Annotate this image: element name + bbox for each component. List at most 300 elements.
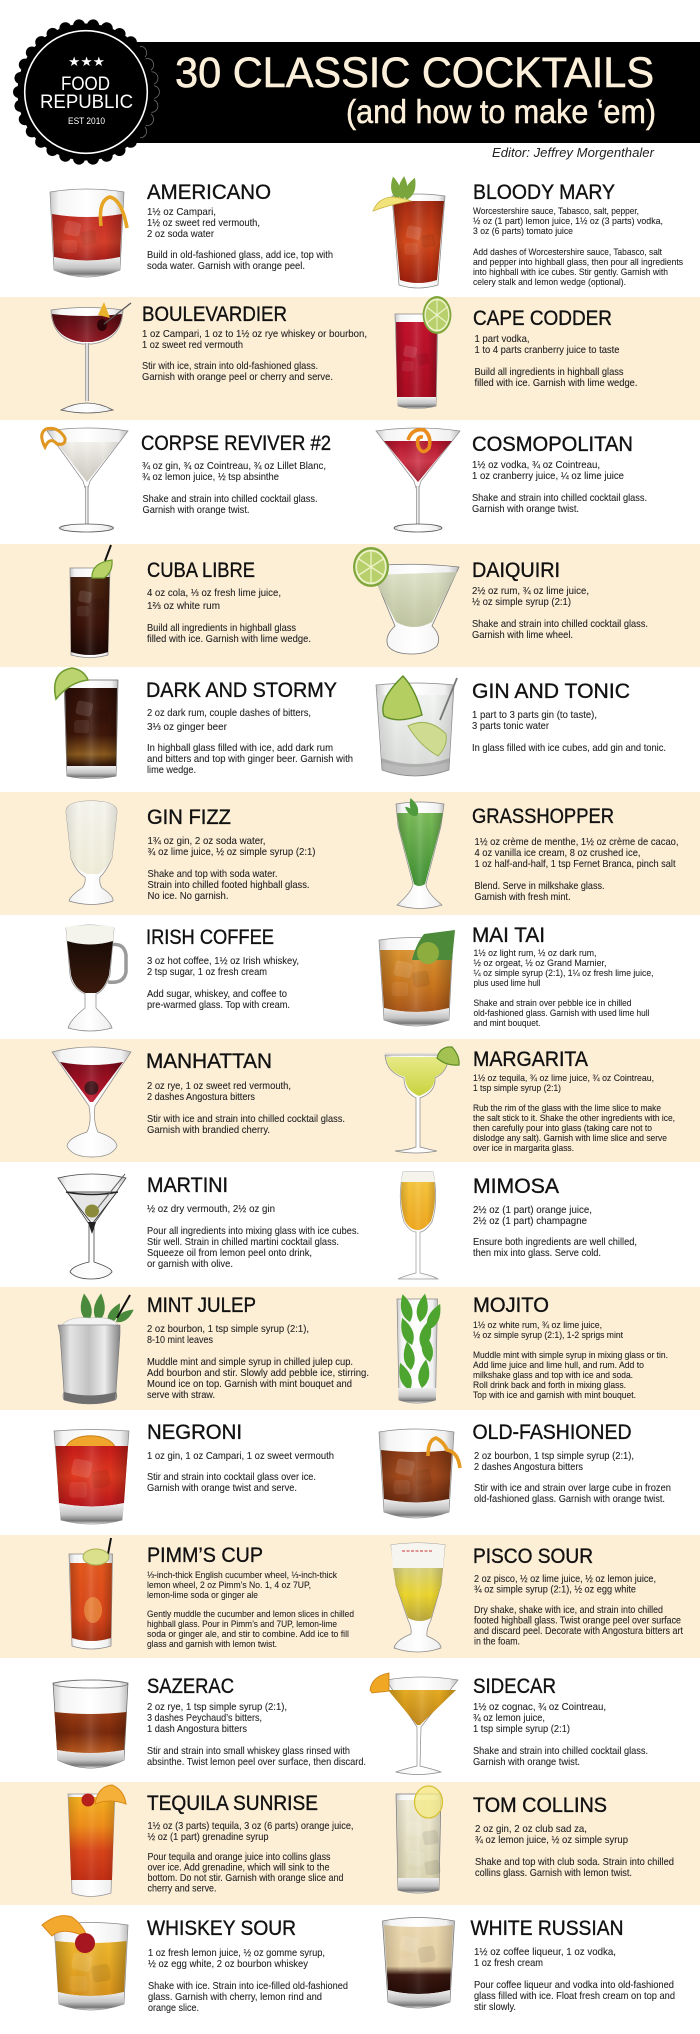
ingredients: 1 oz fresh cream	[474, 1957, 543, 1969]
method: Garnish with fresh mint.	[474, 891, 570, 903]
method: Build all ingredients in highball glass	[147, 622, 296, 634]
method: stir slowly.	[474, 2001, 516, 2013]
ingredients	[472, 459, 624, 482]
method: filled with ice. Garnish with lime wedge.	[147, 633, 311, 645]
method: Roll drink back and forth in mixing glass.	[473, 1380, 626, 1391]
method	[474, 1604, 683, 1648]
method	[474, 1979, 675, 2013]
method: Stir with ice and strain over large cube in frozen	[474, 1482, 671, 1494]
panel: Boulevardier	[51, 302, 367, 413]
method: dislodge any salt). Garnish with lime slice and serve	[473, 1133, 667, 1144]
method: Top with ice and garnish with mint bouquet.	[473, 1390, 636, 1401]
panel: Old-Fashioned	[379, 1421, 671, 1518]
ingredients	[147, 587, 281, 612]
method: Build in old-fashioned glass, add ice, top with	[147, 249, 333, 261]
icon: boulevardier coupe	[51, 302, 131, 413]
heading: PIMM’S CUP	[147, 1544, 263, 1567]
panel: Negroni	[54, 1421, 334, 1524]
icon: mai tai glass	[379, 930, 455, 1026]
ingredients	[147, 1080, 291, 1103]
icon: dark and stormy highball	[55, 668, 118, 778]
ingredients	[147, 955, 299, 978]
ingredients	[142, 460, 326, 483]
icon: mimosa flute	[398, 1172, 438, 1279]
method: soda water. Garnish with orange peel.	[147, 260, 305, 272]
title: 30 CLASSIC COCKTAILS	[175, 49, 654, 97]
method: Mound ice on top. Garnish with mint bouquet and	[147, 1378, 352, 1390]
icon: irish coffee mug	[66, 925, 126, 1031]
ingredients: 1½ oz sweet red vermouth,	[147, 217, 260, 229]
method	[147, 1356, 369, 1401]
method: pre-warmed glass. Top with cream.	[147, 999, 290, 1011]
panel: Tequila Sunrise	[68, 1785, 354, 1896]
heading: SAZERAC	[147, 1675, 234, 1698]
ingredients: 3 oz (6 parts) tomato juice	[473, 226, 573, 237]
method: absinthe. Twist lemon peel over surface, then discard.	[147, 1756, 366, 1768]
icon: cuba libre highball	[70, 545, 112, 658]
panel: Pisco Sour	[391, 1543, 683, 1652]
logo badge: EST 2010	[68, 116, 105, 127]
heading: MARTINI	[147, 1174, 228, 1197]
panel: Grasshopper	[396, 797, 678, 908]
icon: grasshopper glass	[396, 797, 444, 908]
heading: PISCO SOUR	[473, 1545, 593, 1568]
icon: whiskey sour glass	[42, 1916, 128, 2010]
ingredients	[473, 1204, 592, 1227]
method	[148, 868, 310, 902]
heading: WHITE RUSSIAN	[470, 1917, 624, 1940]
ingredients	[147, 206, 260, 240]
ingredients: 1 tsp simple syrup (2:1)	[473, 1723, 570, 1735]
panel: Mint Julep	[58, 1293, 369, 1404]
ingredients: 1⅔ oz white rum	[147, 600, 220, 612]
method: Shake and top with soda water.	[148, 868, 278, 880]
ingredients: 2 oz soda water	[147, 228, 214, 240]
icon: gin and tonic glass	[376, 676, 457, 776]
icon: martini glass	[58, 1174, 126, 1279]
ingredients: 1 oz fresh lemon juice, ½ oz gomme syrup,	[148, 1947, 325, 1959]
method: soda or ginger ale, and stir to combine. Add ice to fill	[147, 1629, 349, 1640]
heading: GIN AND TONIC	[472, 680, 630, 703]
ingredients: 2 oz gin, 2 oz club sad za,	[475, 1823, 587, 1835]
heading: OLD-FASHIONED	[472, 1421, 632, 1444]
ingredients: ½ oz (1 part) lemon juice, 1½ oz (3 parts) vodka,	[473, 216, 663, 227]
heading: COSMOPOLITAN	[472, 433, 633, 456]
header banner	[18, 24, 700, 160]
ingredients: 3 dashes Peychaud’s bitters,	[147, 1712, 262, 1724]
icon: mint julep cup	[58, 1293, 136, 1404]
ingredients: ¼ oz simple syrup (2:1), 1¼ oz fresh lime juice,	[474, 968, 654, 979]
ingredients: 1 oz half-and-half, 1 tsp Fernet Branca, pinch salt	[474, 858, 676, 870]
ingredients: 1 part to 3 parts gin (to taste),	[472, 709, 597, 721]
ingredients: ¾ oz gin, ¾ oz Cointreau, ¾ oz Lillet Blanc,	[142, 460, 326, 472]
ingredients	[474, 1946, 616, 1969]
method: Shake and strain into chilled cocktail glass.	[472, 618, 648, 630]
method: Add lime juice and lime hull, and rum. Add to	[473, 1360, 644, 1371]
ingredients: 1¾ oz gin, 2 oz soda water,	[148, 835, 266, 847]
heading: MANHATTAN	[146, 1050, 272, 1073]
ingredients: 3 oz hot coffee, 1½ oz Irish whiskey,	[147, 955, 299, 967]
panel: Daiquiri	[353, 547, 648, 654]
method: over ice in margarita glass.	[473, 1143, 574, 1154]
panel: Cuba Libre	[70, 545, 311, 658]
ingredients: ⅓-inch-thick English cucumber wheel, ⅓-inch-thick	[147, 1570, 337, 1581]
icon: cape codder highball	[395, 296, 451, 408]
method	[142, 493, 318, 516]
panel: Mimosa	[398, 1172, 637, 1279]
method: Pour tequila and orange juice into collins glass	[148, 1851, 330, 1863]
method: Shake and strain into chilled cocktail glass.	[473, 1745, 648, 1757]
logo badge: REPUBLIC	[40, 92, 133, 113]
ingredients	[474, 836, 678, 870]
ingredients: 2 dashes Angostura bitters	[474, 1461, 583, 1473]
method: Garnish with orange twist.	[142, 504, 250, 516]
method: and mint bouquet.	[474, 1018, 540, 1029]
ingredients: lemon-lime soda or ginger ale	[147, 1590, 258, 1601]
method: In highball glass filled with ice, add dark rum	[147, 742, 333, 754]
ingredients	[473, 206, 663, 237]
ingredients: 1 to 4 parts cranberry juice to taste	[474, 344, 620, 356]
icon: daiquiri glass	[353, 547, 459, 654]
icon: cosmopolitan glass	[376, 428, 460, 532]
panel: Pimm's Cup	[69, 1538, 354, 1650]
ingredients	[147, 1570, 337, 1601]
heading: NEGRONI	[147, 1421, 242, 1444]
method	[147, 1609, 354, 1650]
ingredients: 2 oz pisco, ½ oz lime juice, ½ oz lemon juice,	[474, 1573, 656, 1585]
ingredients: 1½ oz vodka, ¾ oz Cointreau,	[472, 459, 600, 471]
heading: MOJITO	[473, 1294, 549, 1317]
method	[474, 998, 650, 1029]
ingredients: 2 oz rye, 1 tsp simple syrup (2:1),	[147, 1701, 287, 1713]
heading: GIN FIZZ	[147, 806, 231, 829]
heading: SIDECAR	[473, 1675, 556, 1698]
ingredients: 1½ oz crème de menthe, 1½ oz crème de cacao,	[474, 836, 678, 848]
method	[474, 366, 638, 389]
method: orange slice.	[148, 2002, 199, 2014]
panel: Martini	[58, 1174, 359, 1279]
ingredients: 3 parts tonic water	[472, 720, 549, 732]
icon: white russian glass	[382, 1918, 454, 2008]
method: celery stalk and lemon wedge (optional).	[473, 277, 626, 288]
panel: Cape Codder	[395, 296, 638, 408]
ingredients: 2½ oz rum, ¾ oz lime juice,	[472, 585, 589, 597]
icon: margarita glass	[385, 1047, 459, 1153]
method	[147, 1113, 345, 1136]
ingredients: 1½ oz (3 parts) tequila, 3 oz (6 parts) orange juice,	[148, 1820, 354, 1832]
logo badge: FOOD	[61, 74, 110, 95]
icon: pisco sour glass	[391, 1543, 445, 1652]
method	[148, 1851, 344, 1894]
method: Garnish with orange twist.	[472, 503, 579, 515]
method: Muddle mint with simple syrup in mixing glass or tin.	[473, 1350, 668, 1361]
method: bottom. Do not stir. Garnish with orange slice and	[148, 1872, 344, 1884]
ingredients	[148, 1820, 354, 1843]
ingredients: 2 oz bourbon, 1 tsp simple syrup (2:1),	[474, 1450, 634, 1462]
ingredients: ½ oz dry vermouth, 2½ oz gin	[147, 1203, 275, 1215]
icon: sidecar glass	[370, 1673, 458, 1774]
ingredients: 1 oz cranberry juice, ¼ oz lime juice	[472, 470, 624, 482]
icon: bloody mary glass	[373, 176, 445, 288]
method	[147, 622, 311, 645]
heading: MAI TAI	[472, 924, 545, 947]
method: then carefully pour into glass (taking care not to	[473, 1123, 652, 1134]
method: Dry shake, shake with ice, and strain into chilled	[474, 1604, 663, 1616]
method: Garnish with orange twist and serve.	[147, 1482, 297, 1494]
logo badge	[18, 24, 154, 160]
ingredients	[147, 1323, 309, 1346]
ingredients	[475, 1823, 628, 1846]
method: collins glass. Garnish with lemon twist.	[475, 1867, 632, 1879]
heading: MIMOSA	[473, 1175, 559, 1198]
method: filled with ice. Garnish with lime wedge.	[474, 377, 638, 389]
ingredients: 2 dashes Angostura bitters	[147, 1091, 255, 1103]
method	[472, 492, 647, 515]
ingredients: 1 dash Angostura bitters	[147, 1723, 247, 1735]
method	[473, 1103, 675, 1154]
ingredients	[474, 948, 654, 989]
method	[147, 1471, 316, 1494]
icon: negroni glass	[54, 1430, 129, 1524]
ingredients: ¾ oz lemon juice, ½ tsp absinthe	[142, 471, 279, 483]
method: Shake with ice. Strain into ice-filled old-fashioned	[148, 1980, 348, 1992]
icon: manhattan glass	[52, 1047, 131, 1157]
method: then mix into glass. Serve cold.	[473, 1247, 601, 1259]
method: serve with straw.	[147, 1389, 215, 1401]
icon: corpse reviver glass	[42, 428, 128, 532]
heading: WHISKEY SOUR	[147, 1917, 296, 1940]
panel: Dark and Stormy	[55, 668, 353, 778]
ingredients	[474, 1573, 656, 1596]
heading: TOM COLLINS	[473, 1794, 607, 1817]
method: Shake and top with club soda. Strain into chilled	[475, 1856, 674, 1868]
icon: americano glass	[50, 189, 127, 277]
heading: DAIQUIRI	[472, 559, 560, 582]
ingredients	[472, 585, 589, 608]
method	[474, 880, 604, 903]
method: Ensure both ingredients are well chilled,	[473, 1236, 637, 1248]
method: Pour coffee liqueur and vodka into old-fashioned	[474, 1979, 674, 1991]
ingredients: 1 oz Campari, 1 oz to 1½ oz rye whiskey or bourbon,	[142, 328, 367, 340]
method: Squeeze oil from lemon peel onto drink,	[147, 1247, 312, 1259]
ingredients: ½ oz egg white, 2 oz bourbon whiskey	[148, 1958, 309, 1970]
method: Garnish with orange peel or cherry and serve.	[142, 371, 333, 383]
method: Add bourbon and stir. Slowly add pebble ice, stirring.	[147, 1367, 369, 1379]
method: Shake and strain over pebble ice in chilled	[474, 998, 632, 1009]
method: Strain into chilled footed highball glass.	[148, 879, 310, 891]
ingredients	[148, 1947, 325, 1970]
method: Garnish with lime wheel.	[472, 629, 573, 641]
ingredients: 3⅓ oz ginger beer	[147, 721, 227, 733]
method: glass and garnish with lemon twist.	[147, 1639, 277, 1650]
ingredients: lemon wheel, 2 oz Pimm’s No. 1, 4 oz 7UP,	[147, 1580, 311, 1591]
method: the salt stick to it. Shake the other ingredients with ice,	[473, 1113, 675, 1124]
method	[147, 1225, 359, 1270]
panel: Whiskey Sour	[42, 1916, 348, 2014]
method	[472, 618, 648, 641]
method	[147, 249, 333, 272]
method: over ice. Add grenadine, which will sink to the	[148, 1862, 330, 1874]
ingredients: ¾ oz lemon juice,	[473, 1712, 545, 1724]
method: or garnish with olive.	[147, 1258, 233, 1270]
heading: GRASSHOPPER	[472, 805, 614, 828]
method: Shake and strain into chilled cocktail glass.	[142, 493, 318, 505]
ingredients: 1½ oz cognac, ¾ oz Cointreau,	[473, 1701, 606, 1713]
panel: Mai Tai	[379, 924, 654, 1029]
ingredients: 2 tsp sugar, 1 oz fresh cream	[147, 966, 267, 978]
ingredients: plus used lime hull	[474, 978, 540, 989]
subtitle: (and how to make ‘em)	[346, 93, 656, 130]
method: Blend. Serve in milkshake glass.	[474, 880, 604, 892]
method: Stir well. Strain in chilled martini cocktail glass.	[147, 1236, 339, 1248]
heading: IRISH COFFEE	[146, 926, 274, 949]
method: No ice. No garnish.	[148, 890, 228, 902]
method: old-fashioned glass. Garnish with used lime hull	[474, 1008, 650, 1019]
ingredients: 1½ oz light rum, ½ oz dark rum,	[474, 948, 596, 959]
method	[142, 360, 333, 383]
ingredients	[147, 707, 311, 733]
method: Add sugar, whiskey, and coffee to	[147, 988, 287, 1000]
method	[148, 1980, 348, 2014]
heading: TEQUILA SUNRISE	[147, 1792, 318, 1815]
panel: Margarita	[385, 1047, 675, 1154]
ingredients	[473, 1320, 623, 1341]
method: old-fashioned glass. Garnish with orange twist.	[474, 1493, 665, 1505]
panel: White Russian	[382, 1917, 675, 2013]
ingredients: 1½ oz white rum, ¾ oz lime juice,	[473, 1320, 602, 1331]
icon: tom collins highball	[396, 1786, 442, 1893]
method	[475, 1856, 674, 1879]
method: Muddle mint and simple syrup in chilled julep cup.	[147, 1356, 353, 1368]
ingredients	[474, 333, 620, 356]
method: highball glass. Pour in Pimm’s and 7UP, lemon-lime	[147, 1619, 337, 1630]
ingredients: 2 oz bourbon, 1 tsp simple syrup (2:1),	[147, 1323, 309, 1335]
ingredients	[473, 1701, 606, 1735]
method: Shake and strain into chilled cocktail glass.	[472, 492, 647, 504]
heading: CAPE CODDER	[473, 307, 612, 330]
method: Pour all ingredients into mixing glass with ice cubes.	[147, 1225, 359, 1237]
ingredients: 2 oz dark rum, couple dashes of bitters,	[147, 707, 311, 719]
ingredients: 2½ oz (1 part) orange juice,	[473, 1204, 592, 1216]
ingredients: 1½ oz tequila, ¾ oz lime juice, ¾ oz Cointreau,	[473, 1073, 654, 1084]
heading: AMERICANO	[147, 181, 271, 204]
method	[473, 1350, 668, 1401]
heading: CORPSE REVIVER #2	[141, 432, 331, 455]
method: and bitters and top with ginger beer. Garnish with	[147, 753, 353, 765]
ingredients: 1 oz gin, 1 oz Campari, 1 oz sweet vermouth	[147, 1450, 334, 1462]
ingredients: ¾ oz simple syrup (2:1), ½ oz egg white	[474, 1584, 636, 1596]
ingredients: 1½ oz coffee liqueur, 1 oz vodka,	[474, 1946, 616, 1958]
method: lime wedge.	[147, 764, 196, 776]
ingredients: 4 oz vanilla ice cream, 8 oz crushed ice,	[474, 847, 640, 859]
method: In glass filled with ice cubes, add gin and tonic.	[472, 742, 666, 754]
ingredients: 8-10 mint leaves	[147, 1334, 213, 1346]
panel: Sazerac	[53, 1675, 366, 1768]
ingredients: ¾ oz lime juice, ½ oz simple syrup (2:1)	[148, 846, 316, 858]
method: glass filled with ice. Float fresh cream on top and	[474, 1990, 675, 2002]
icon: mojito highball	[395, 1293, 445, 1403]
method: into highball with ice cubes. Stir gently. Garnish with	[473, 267, 668, 278]
ingredients: 1 oz sweet red vermouth	[142, 339, 243, 351]
heading: MINT JULEP	[147, 1294, 256, 1317]
panel: Bloody Mary	[373, 176, 683, 288]
ingredients: ½ oz simple syrup (2:1)	[472, 596, 571, 608]
ingredients: 2½ oz (1 part) champagne	[473, 1215, 587, 1227]
ingredients	[147, 1701, 287, 1735]
heading: DARK AND STORMY	[146, 679, 337, 702]
panel: Corpse Reviver #2	[42, 428, 331, 532]
method: Add dashes of Worcestershire sauce, Tabasco, salt	[473, 247, 662, 258]
method	[473, 1745, 648, 1768]
icon: gin fizz glass	[66, 801, 117, 904]
method: Stir with ice, strain into old-fashioned glass.	[142, 360, 318, 372]
panel: Gin and Tonic	[376, 676, 666, 776]
method: cherry and serve.	[148, 1882, 216, 1894]
ingredients	[142, 328, 367, 351]
ingredients: 2 oz rye, 1 oz sweet red vermouth,	[147, 1080, 291, 1092]
panel: Manhattan	[52, 1047, 345, 1157]
method: glass. Garnish with cherry, lemon rind and	[148, 1991, 322, 2003]
icon: pimm's cup highball	[69, 1538, 112, 1649]
panel: Tom Collins	[396, 1786, 674, 1893]
method	[474, 1482, 671, 1505]
method: Gently muddle the cucumber and lemon slices in chilled	[147, 1609, 354, 1620]
panel: Gin Fizz	[66, 801, 316, 904]
method	[473, 247, 683, 288]
method: Stir with ice and strain into chilled cocktail glass.	[147, 1113, 345, 1125]
ingredients	[474, 1450, 634, 1473]
panel: Sidecar	[370, 1673, 648, 1774]
method: Build all ingredients in highball glass	[474, 366, 624, 378]
logo badge: ★★★	[68, 54, 105, 69]
ingredients: ½ oz simple syrup (2:1), 1-2 sprigs mint	[473, 1330, 623, 1341]
ingredients	[472, 709, 597, 732]
editor credit: Editor: Jeffrey Morgenthaler	[492, 146, 655, 160]
method	[147, 742, 353, 776]
ingredients	[473, 1073, 654, 1094]
panel: Mojito	[395, 1293, 668, 1403]
method: Rub the rim of the glass with the lime slice to make	[473, 1103, 661, 1114]
ingredients: ½ oz orgeat, ½ oz Grand Marnier,	[474, 958, 606, 969]
icon: sazerac glass	[53, 1680, 128, 1768]
method: milkshake glass and top with ice and soda.	[473, 1370, 633, 1381]
ingredients: ½ oz (1 part) grenadine syrup	[148, 1831, 269, 1843]
method	[473, 1236, 637, 1259]
ingredients: 1 tsp simple syrup (2:1)	[473, 1083, 561, 1094]
method: Garnish with brandied cherry.	[147, 1124, 270, 1136]
ingredients: 4 oz cola, ⅓ oz fresh lime juice,	[147, 587, 281, 599]
method	[147, 1745, 366, 1768]
method: Garnish with orange twist.	[473, 1756, 580, 1768]
icon: old-fashioned glass	[379, 1429, 460, 1518]
panel: Americano	[50, 181, 333, 277]
heading: BOULEVARDIER	[142, 303, 287, 326]
ingredients	[148, 835, 316, 858]
ingredients: 1½ oz Campari,	[147, 206, 216, 218]
panel: Cosmopolitan	[376, 428, 647, 532]
ingredients: ¾ oz lemon juice, ½ oz simple syrup	[475, 1834, 628, 1846]
panel: Irish Coffee	[66, 925, 299, 1031]
ingredients: 1 part vodka,	[474, 333, 530, 345]
heading: BLOODY MARY	[473, 181, 615, 204]
icon: tequila sunrise highball	[68, 1785, 126, 1896]
method: Stir and strain into small whiskey glass rinsed with	[147, 1745, 350, 1757]
ingredients: Worcestershire sauce, Tabasco, salt, pepper,	[473, 206, 639, 217]
method	[147, 988, 290, 1011]
method: in the foam.	[474, 1636, 520, 1648]
method: Stir and strain into cocktail glass over ice.	[147, 1471, 316, 1483]
heading: MARGARITA	[473, 1048, 588, 1071]
